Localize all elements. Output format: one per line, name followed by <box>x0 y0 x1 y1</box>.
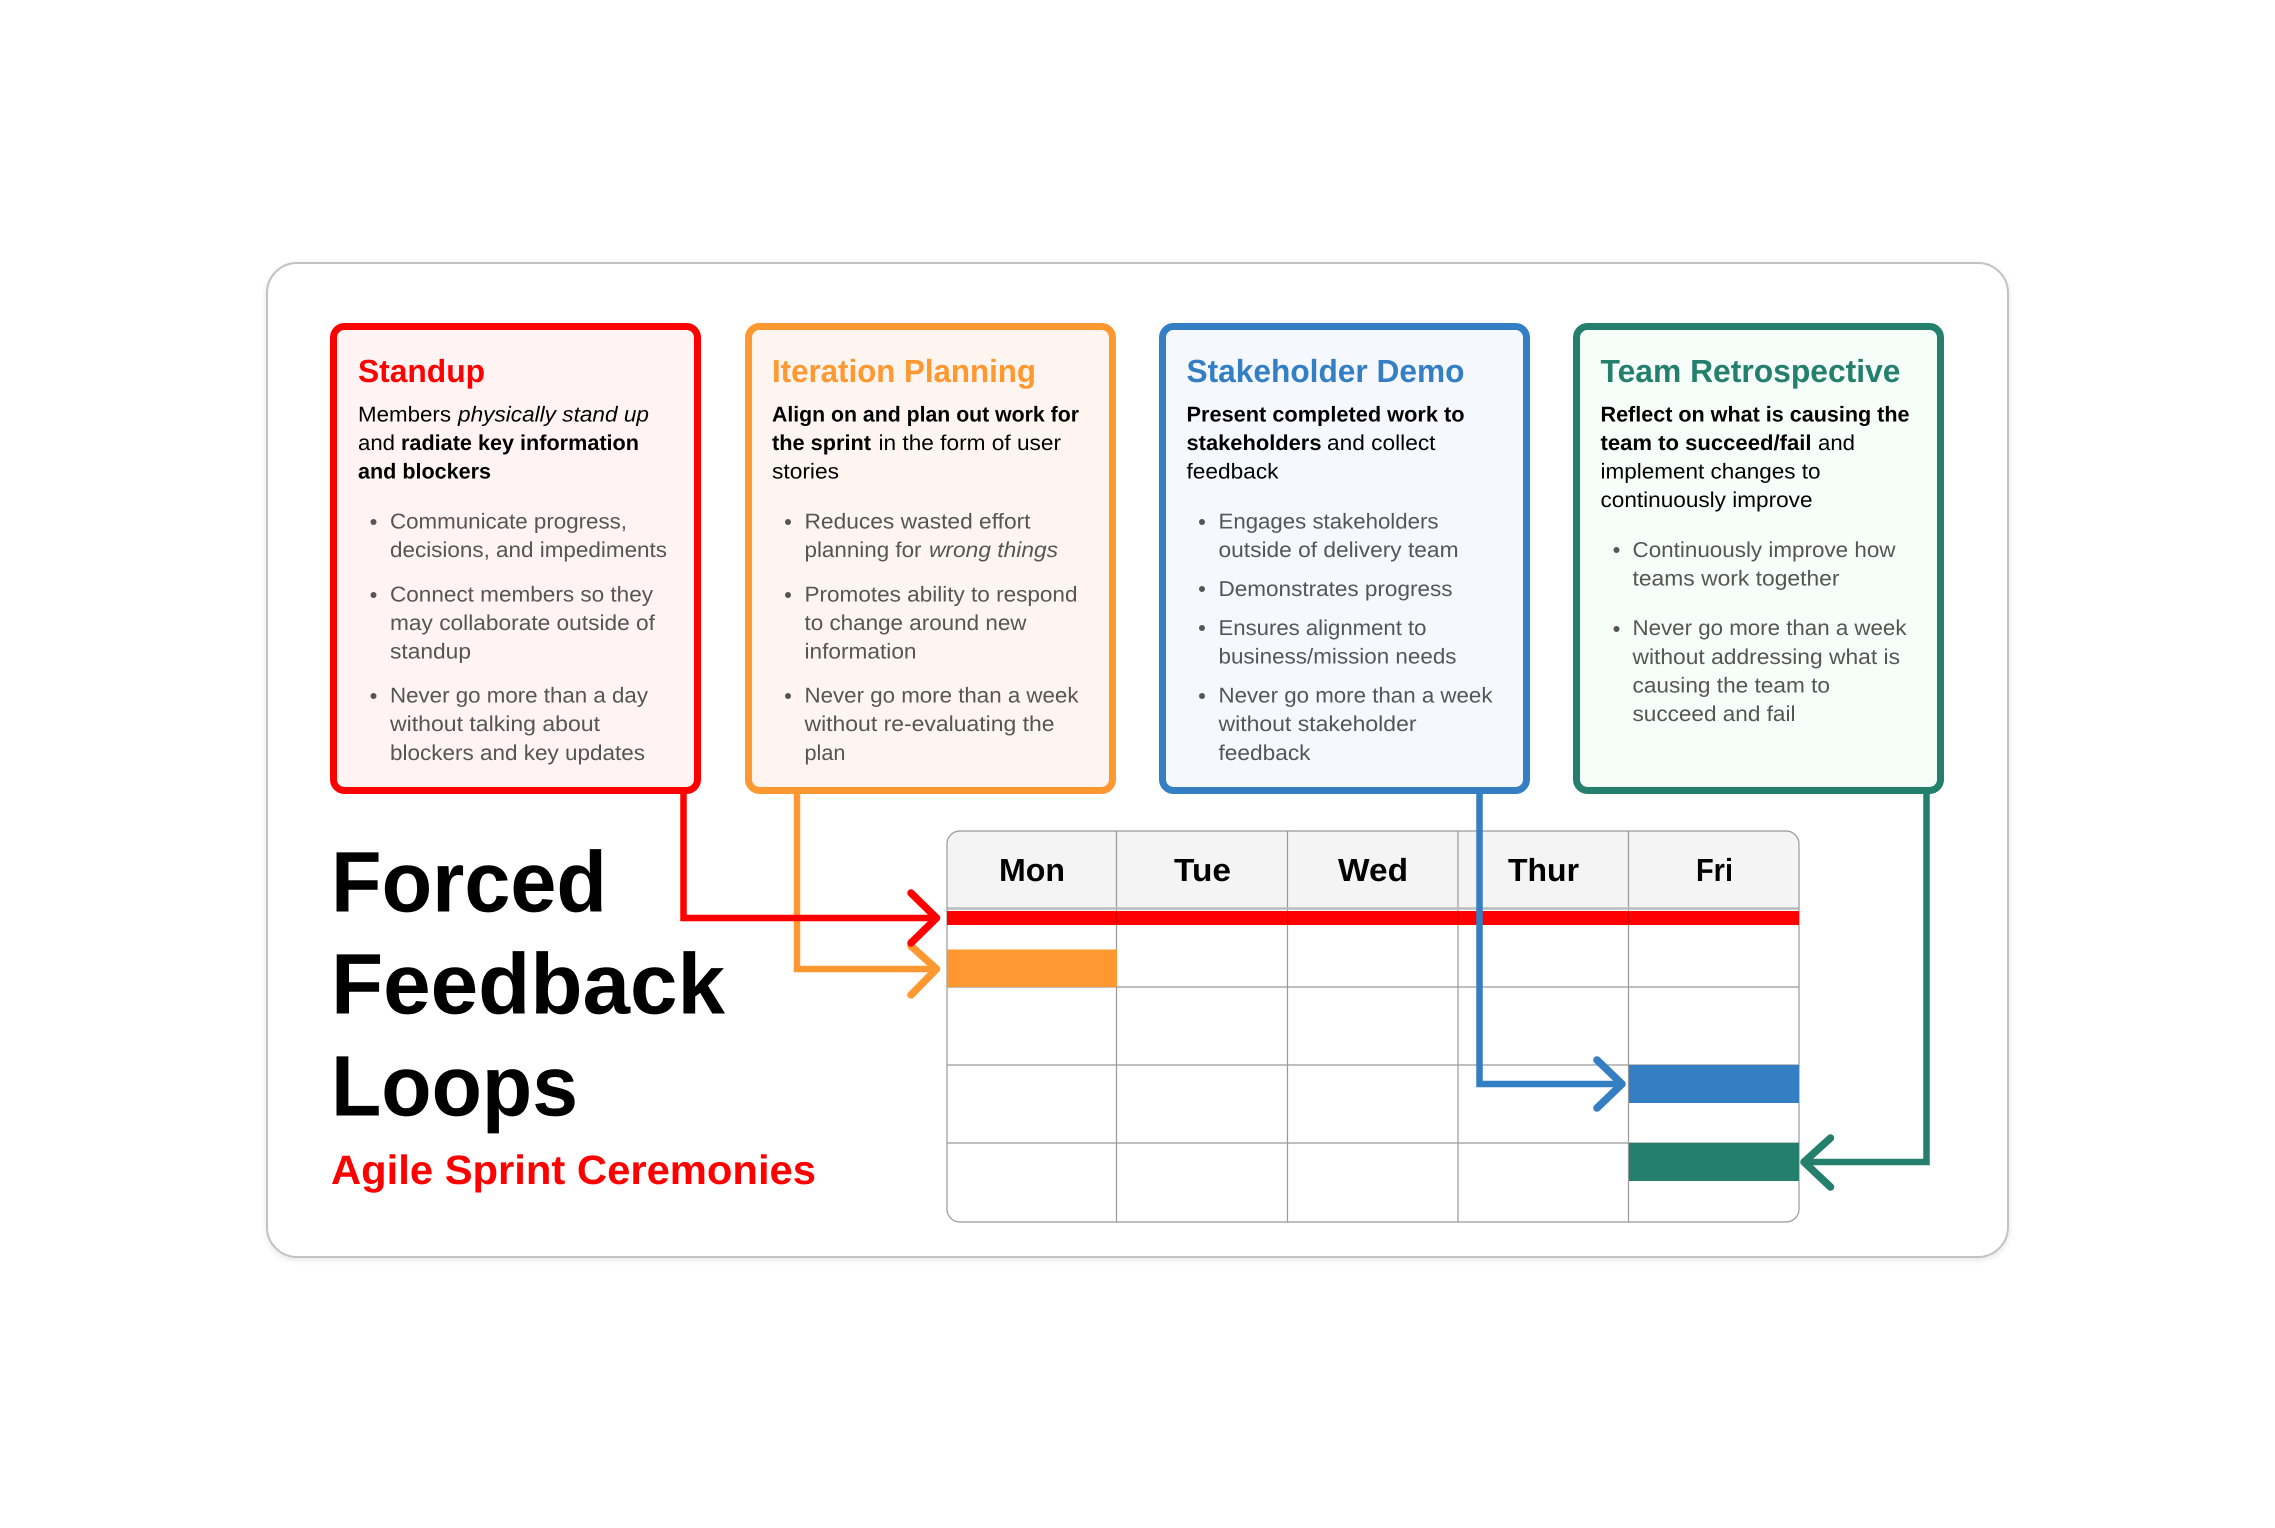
intro text: iteration planning: Align on and plan out work for <box>772 403 1080 427</box>
bullet list: stakeholder demo: Demonstrates progress <box>1218 577 1452 601</box>
heading: stakeholder demo: Stakeholder Demo <box>1186 353 1464 389</box>
intro text: team retrospective: and <box>1818 431 1855 455</box>
card box: standup <box>334 326 698 790</box>
panel: team retrospective <box>1576 326 1940 790</box>
bar: iteration planning <box>947 950 1117 987</box>
panel: stakeholder demo <box>1162 326 1526 790</box>
bullet list: team retrospective: Never go more than a week <box>1632 616 1907 640</box>
bullet list: stakeholder demo: business/mission needs <box>1218 645 1456 669</box>
card box: stakeholder demo <box>1162 326 1526 790</box>
bullet list: team retrospective: succeed and fail <box>1632 702 1796 726</box>
bar: team retrospective <box>1629 1143 1799 1181</box>
bullet list: stakeholder demo: without stakeholder <box>1217 712 1416 736</box>
bullet list: stakeholder demo: Never go more than a week <box>1218 684 1493 708</box>
intro text: stakeholder demo: Present completed work to <box>1186 403 1464 427</box>
bullet list: standup: Never go more than a day <box>390 684 648 708</box>
heading: iteration planning: Iteration Planning <box>772 353 1036 389</box>
bullet list: stakeholder demo: outside of delivery team <box>1218 538 1458 562</box>
bar: stakeholder demo <box>1629 1065 1799 1103</box>
arrow: stakeholder demo to Friday <box>1480 790 1622 1108</box>
heading: standup: Standup <box>358 353 485 389</box>
intro text: stakeholder demo <box>1186 403 1464 484</box>
bullet list: iteration planning: planning for <box>804 538 922 562</box>
day label: Fri: Fri <box>1696 852 1733 888</box>
bullet list: standup <box>370 510 667 765</box>
panel: iteration planning <box>748 326 1112 790</box>
bullet list: standup: blockers and key updates <box>390 741 645 765</box>
bullet list: standup: Connect members so they <box>390 583 653 607</box>
header row background <box>947 831 1799 908</box>
bullet list: team retrospective: teams work together <box>1632 567 1840 591</box>
title <box>331 834 725 1134</box>
bullet list: stakeholder demo: feedback <box>1218 741 1311 765</box>
bullet list: iteration planning: Promotes ability to respond <box>804 583 1078 607</box>
intro text: team retrospective: implement changes to <box>1600 460 1821 484</box>
intro text: stakeholder demo: and collect <box>1327 431 1436 455</box>
bullet list: team retrospective: without addressing what is <box>1631 645 1900 669</box>
bullet list: iteration planning: plan <box>804 741 846 765</box>
intro text: standup: and blockers <box>358 460 491 484</box>
card box: team retrospective <box>1576 326 1940 790</box>
intro text: team retrospective: Reflect on what is causing the <box>1600 403 1910 427</box>
bullet list: stakeholder demo <box>1199 510 1493 765</box>
intro text: iteration planning: stories <box>772 460 839 484</box>
intro text: standup: radiate key information <box>401 431 639 455</box>
title: Loops <box>331 1038 578 1134</box>
bullet list: iteration planning: to change around new <box>804 611 1027 635</box>
intro text: standup: physically stand up <box>457 403 649 427</box>
outer panel <box>267 263 2008 1257</box>
card box: iteration planning <box>748 326 1112 790</box>
bullet list: stakeholder demo: Engages stakeholders <box>1218 510 1438 534</box>
bullet list: stakeholder demo: Ensures alignment to <box>1218 616 1427 640</box>
title: Feedback <box>331 936 725 1032</box>
day label: Wed: Wed <box>1338 852 1408 888</box>
intro text: iteration planning: the sprint <box>772 431 871 455</box>
intro text: standup <box>358 403 649 484</box>
intro text: team retrospective: team to succeed/fail <box>1600 431 1812 455</box>
day label: Mon: Mon <box>999 852 1065 888</box>
bullet list: standup: decisions, and impediments <box>390 538 667 562</box>
bullet list: iteration planning: wrong things <box>929 538 1058 562</box>
bullet list: team retrospective <box>1614 538 1907 726</box>
arrow: standup to daily bar <box>684 790 936 943</box>
intro text: iteration planning: in the form of user <box>878 431 1061 455</box>
bar: standup daily <box>947 911 1799 925</box>
intro text: iteration planning <box>772 403 1080 484</box>
bullet list: standup: Communicate progress, <box>390 510 627 534</box>
bullet list: standup: without talking about <box>389 712 600 736</box>
heading: team retrospective: Team Retrospective <box>1600 353 1900 389</box>
bullet list: iteration planning <box>785 510 1079 765</box>
bullet list: iteration planning: information <box>804 640 916 664</box>
day label: Tue: Tue <box>1174 852 1231 888</box>
bullet list: standup: standup <box>390 640 471 664</box>
panel: standup <box>334 326 698 790</box>
intro text: stakeholder demo: feedback <box>1186 460 1279 484</box>
bullet list: iteration planning: Never go more than a week <box>804 684 1079 708</box>
intro text: team retrospective <box>1600 403 1910 512</box>
bullet list: iteration planning: Reduces wasted effort <box>804 510 1031 534</box>
intro text: standup: Members <box>358 403 451 427</box>
arrow: team retrospective to Friday <box>1804 790 1926 1187</box>
intro text: stakeholder demo: stakeholders <box>1186 431 1322 455</box>
intro text: standup: and <box>358 431 395 455</box>
subtitle: Agile Sprint Ceremonies <box>331 1147 816 1193</box>
calendar table <box>947 831 1799 1222</box>
bullet list: iteration planning: without re-evaluating the <box>803 712 1054 736</box>
bullet list: team retrospective: causing the team to <box>1632 674 1830 698</box>
title: Forced <box>331 834 607 930</box>
bullet list: team retrospective: Continuously improve how <box>1632 538 1896 562</box>
arrow: iteration planning to Monday <box>797 790 936 995</box>
day label: Thur: Thur <box>1508 852 1579 888</box>
bullet list: standup: may collaborate outside of <box>390 611 655 635</box>
intro text: team retrospective: continuously improve <box>1600 488 1812 512</box>
